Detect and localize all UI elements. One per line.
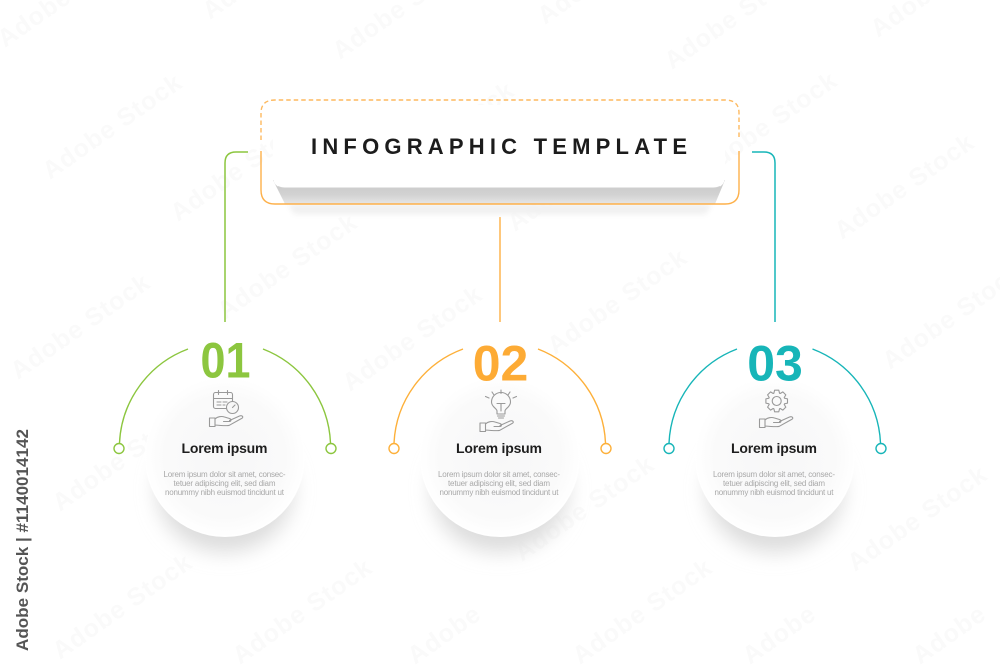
- body text: nonummy nibh euismod tincidunt ut: [165, 488, 285, 497]
- title panel: [261, 100, 739, 214]
- body text: [713, 470, 835, 497]
- body text: [164, 470, 286, 497]
- heading: Lorem ipsum: [456, 440, 542, 456]
- watermark pattern: Adobe Stock: [542, 243, 693, 360]
- watermark pattern: Adobe Stock: [692, 66, 843, 183]
- connector: teal: [752, 152, 775, 322]
- disc shadow: [707, 428, 843, 552]
- icon: light bulb and hand: [480, 390, 516, 432]
- frame solid bottom: [261, 151, 739, 204]
- panel side band: [273, 180, 725, 204]
- arc end dots: [389, 444, 611, 454]
- watermark pattern: Adobe Stock: [337, 280, 488, 397]
- number: 02: [473, 336, 528, 392]
- body text: tetuer adipiscing elit, sed diam: [448, 479, 550, 488]
- watermark pattern: Adobe Stock: [829, 128, 980, 245]
- disc shadow: [157, 428, 293, 552]
- body text: Lorem ipsum dolor sit amet, consec-: [438, 470, 560, 479]
- body text: tetuer adipiscing elit, sed diam: [723, 479, 825, 488]
- body text: Lorem ipsum dolor sit amet, consec-: [713, 470, 835, 479]
- connector: orange: [499, 217, 501, 322]
- heading: Lorem ipsum: [731, 440, 817, 456]
- disc: [145, 377, 305, 537]
- watermark pattern: Adobe Stock: [212, 208, 363, 325]
- body text: Lorem ipsum dolor sit amet, consec-: [164, 470, 286, 479]
- arc end dots: [114, 444, 336, 454]
- icon: calendar and hand: [210, 390, 243, 426]
- body text: nonummy nibh euismod tincidunt ut: [440, 488, 559, 497]
- watermark pattern: Adobe Stock: [47, 400, 198, 517]
- disc: [695, 377, 855, 537]
- arc: [394, 349, 606, 443]
- disc shadow: [432, 428, 568, 552]
- connector: green: [225, 152, 248, 322]
- heading: Lorem ipsum: [182, 440, 268, 456]
- icon: gear and hand: [760, 390, 793, 428]
- panel face: [273, 105, 725, 188]
- step 01: [114, 332, 336, 552]
- watermark pattern: Adobe Stock: [567, 553, 718, 667]
- title: INFOGRAPHIC TEMPLATE: [311, 134, 687, 159]
- watermark pattern: Adobe Stock: [165, 110, 316, 227]
- arc end dots: [664, 444, 886, 454]
- step 02: [389, 336, 611, 552]
- body text: [438, 470, 560, 497]
- arc: [120, 349, 330, 443]
- watermark pattern: Adobe Stock: [842, 460, 993, 577]
- number: 01: [200, 332, 250, 388]
- body text: tetuer adipiscing elit, sed diam: [174, 479, 276, 488]
- step 03: [664, 336, 886, 552]
- side credit: Adobe Stock | #1140014142: [13, 429, 32, 651]
- watermark pattern: Adobe Stock: [502, 120, 653, 237]
- watermark pattern: Adobe Stock: [5, 268, 156, 385]
- disc: [420, 377, 580, 537]
- watermark pattern: Adobe Stock: [37, 68, 188, 185]
- watermark pattern: Adobe Stock: [47, 548, 198, 665]
- panel drop shadow: [288, 204, 712, 214]
- frame dashed top: [261, 100, 739, 140]
- watermark pattern: Adobe Stock: [227, 553, 378, 667]
- watermark pattern: Adobe Stock: [369, 76, 520, 193]
- body text: nonummy nibh euismod tincidunt ut: [714, 488, 834, 497]
- number: 03: [747, 336, 803, 392]
- arc: [669, 349, 880, 443]
- watermark pattern: Adobe Stock: [509, 450, 660, 567]
